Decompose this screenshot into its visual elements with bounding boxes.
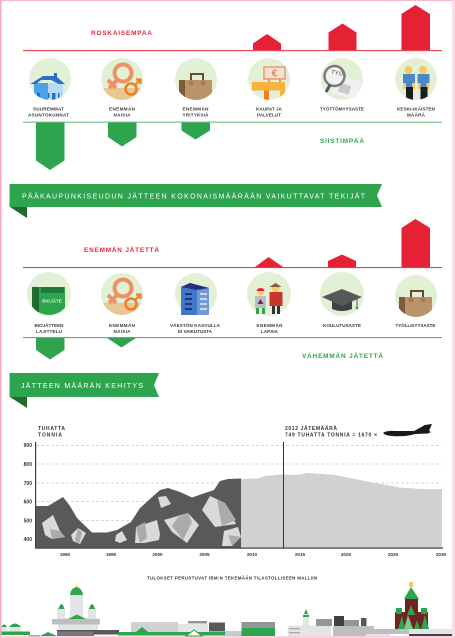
vertical marker [283,442,284,548]
icon labels row 1: PALVELUT [257,112,281,118]
green baseline 2 [23,337,442,338]
icon labels row 2: NAISIA [114,329,131,334]
x axis labels: 2020 [341,552,352,557]
icon labels row 1: KESKI-IKÄISTEN [397,106,436,112]
icon labels row 1: ENEMMÄN [109,106,136,112]
label: vähemmän jätettä: VÄHEMMÄN JÄTETTÄ [302,352,383,360]
icon: biowaste bin: BIOJÄTE [42,298,62,304]
axis title [38,426,65,438]
axis title: TUHATTA [38,426,65,432]
icon labels row 2 [34,322,436,334]
icon labels row 2: ENEMMÄN [256,322,283,328]
footnote: TULOKSET PERUSTUVAT IBM:N TEKEMÄÄN TILASTOLLISEEN MALLIIN [147,576,317,580]
icon: magnifier on newspaper [321,58,363,100]
icon labels row 1 [28,106,436,118]
icon: apartment block [175,273,217,315]
y axis labels: 700 [24,481,32,487]
icon labels row 2: BIOJÄTTEEN [34,322,64,328]
icon labels row 1: ASUNTOKUNNAT [28,112,69,118]
icon labels row 1: KAUPAT JA [256,106,283,112]
green baseline 1 [23,122,442,123]
x axis labels: 2025 [388,552,399,557]
icon labels row 2: TYÖLLISYYSASTE [396,322,436,328]
x axis labels: 1995 [106,552,117,557]
x axis labels: 2010 [247,552,258,557]
y axis labels: 800 [24,462,32,468]
x axis labels: 2015 [295,552,306,557]
icon: graduation cap [320,272,364,316]
central buildings [118,621,242,636]
white building with tower [288,609,331,636]
icon: magnifier on newspaper: TYÖ [330,69,344,78]
x axis labels [60,552,447,557]
green hall [242,622,275,636]
icon: two people [395,58,437,101]
x axis labels: 1990 [60,552,71,557]
y axis labels: 500 [24,518,32,524]
annotation 2012 [285,425,377,438]
banner 2: JÄTTEEN MÄÄRÄN KEHITYS [21,382,143,390]
icon: biowaste bin [27,272,71,316]
annotation 2012: 749 TUHATTA TONNIA = 1670 × [285,432,377,438]
left small buildings [2,624,57,636]
green bars 1 [36,122,210,170]
red bars 1 [253,5,430,50]
label: siistimpää: SIISTIMPÄÄ [320,137,364,145]
red baseline 1 [23,50,442,51]
icon: briefcase [175,58,217,101]
axes [35,442,443,549]
x axis labels: 2005 [199,552,210,557]
waste rocks [42,496,241,546]
y axis labels: 600 [24,500,32,506]
icon: airplane [383,424,432,436]
icon: market stall [248,58,290,102]
banner 2 [10,373,159,408]
banner 1 [10,184,382,218]
cathedral [52,584,119,636]
icon labels row 1: NAISIA [114,112,131,118]
icon: briefcase [395,275,437,318]
y axis labels [24,443,32,543]
icon labels row 2: VÄESTÖN KASVULLA [170,322,221,328]
y axis labels: 400 [24,537,32,543]
label: roskaisempaa: ROSKAISEMPAA [91,30,152,37]
icon labels row 2: LAJITTELU [36,329,63,334]
skyline [2,582,452,636]
annotation 2012: 2012 JÄTEMÄÄRÄ [285,425,337,432]
grid lines [36,446,442,520]
x axis labels: 2030 [436,552,447,557]
red baseline 2 [23,267,442,268]
label: enemmän jätettä: ENEMMÄN JÄTETTÄ [84,246,159,254]
icon labels row 1: ENEMMÄN [182,106,209,112]
icon: female male [101,58,143,101]
icon labels row 1: YRITYKSIÄ [182,112,209,118]
uspenski cathedral [395,582,429,629]
banner 1: PÄÄKAUPUNKISEUDUN JÄTTEEN KOKONAISMÄÄRÄÄN VAIKUTTAVAT TEKIJÄT [22,192,366,200]
grey buildings [316,616,452,636]
icon labels row 2: KOULUTUSASTE [323,323,361,328]
icon labels row 2: ENEMMÄN [109,322,136,328]
icon: children [247,272,291,316]
foreground right [366,629,452,636]
icon labels row 1: MÄÄRÄ [407,112,426,118]
icon: female male [101,273,143,316]
icon labels row 2: LAPSIA [261,329,279,334]
green bars 2 [36,338,136,360]
chart: waste development [24,424,447,557]
icon labels row 1: SUUREMMAT [33,106,64,112]
historic area [36,478,241,548]
y axis labels: 900 [24,443,32,449]
icon labels row 2: EI VAIKUTUSTA [178,329,213,334]
icon labels row 1: TYÖTTÖMYYSASTE [320,106,364,112]
x axis labels: 2000 [152,552,163,557]
axis title: TONNIA [38,432,62,438]
icon: house [29,58,71,101]
forecast area [241,473,442,548]
red bars 2 [255,219,430,267]
icon: market stall: € [272,68,278,80]
